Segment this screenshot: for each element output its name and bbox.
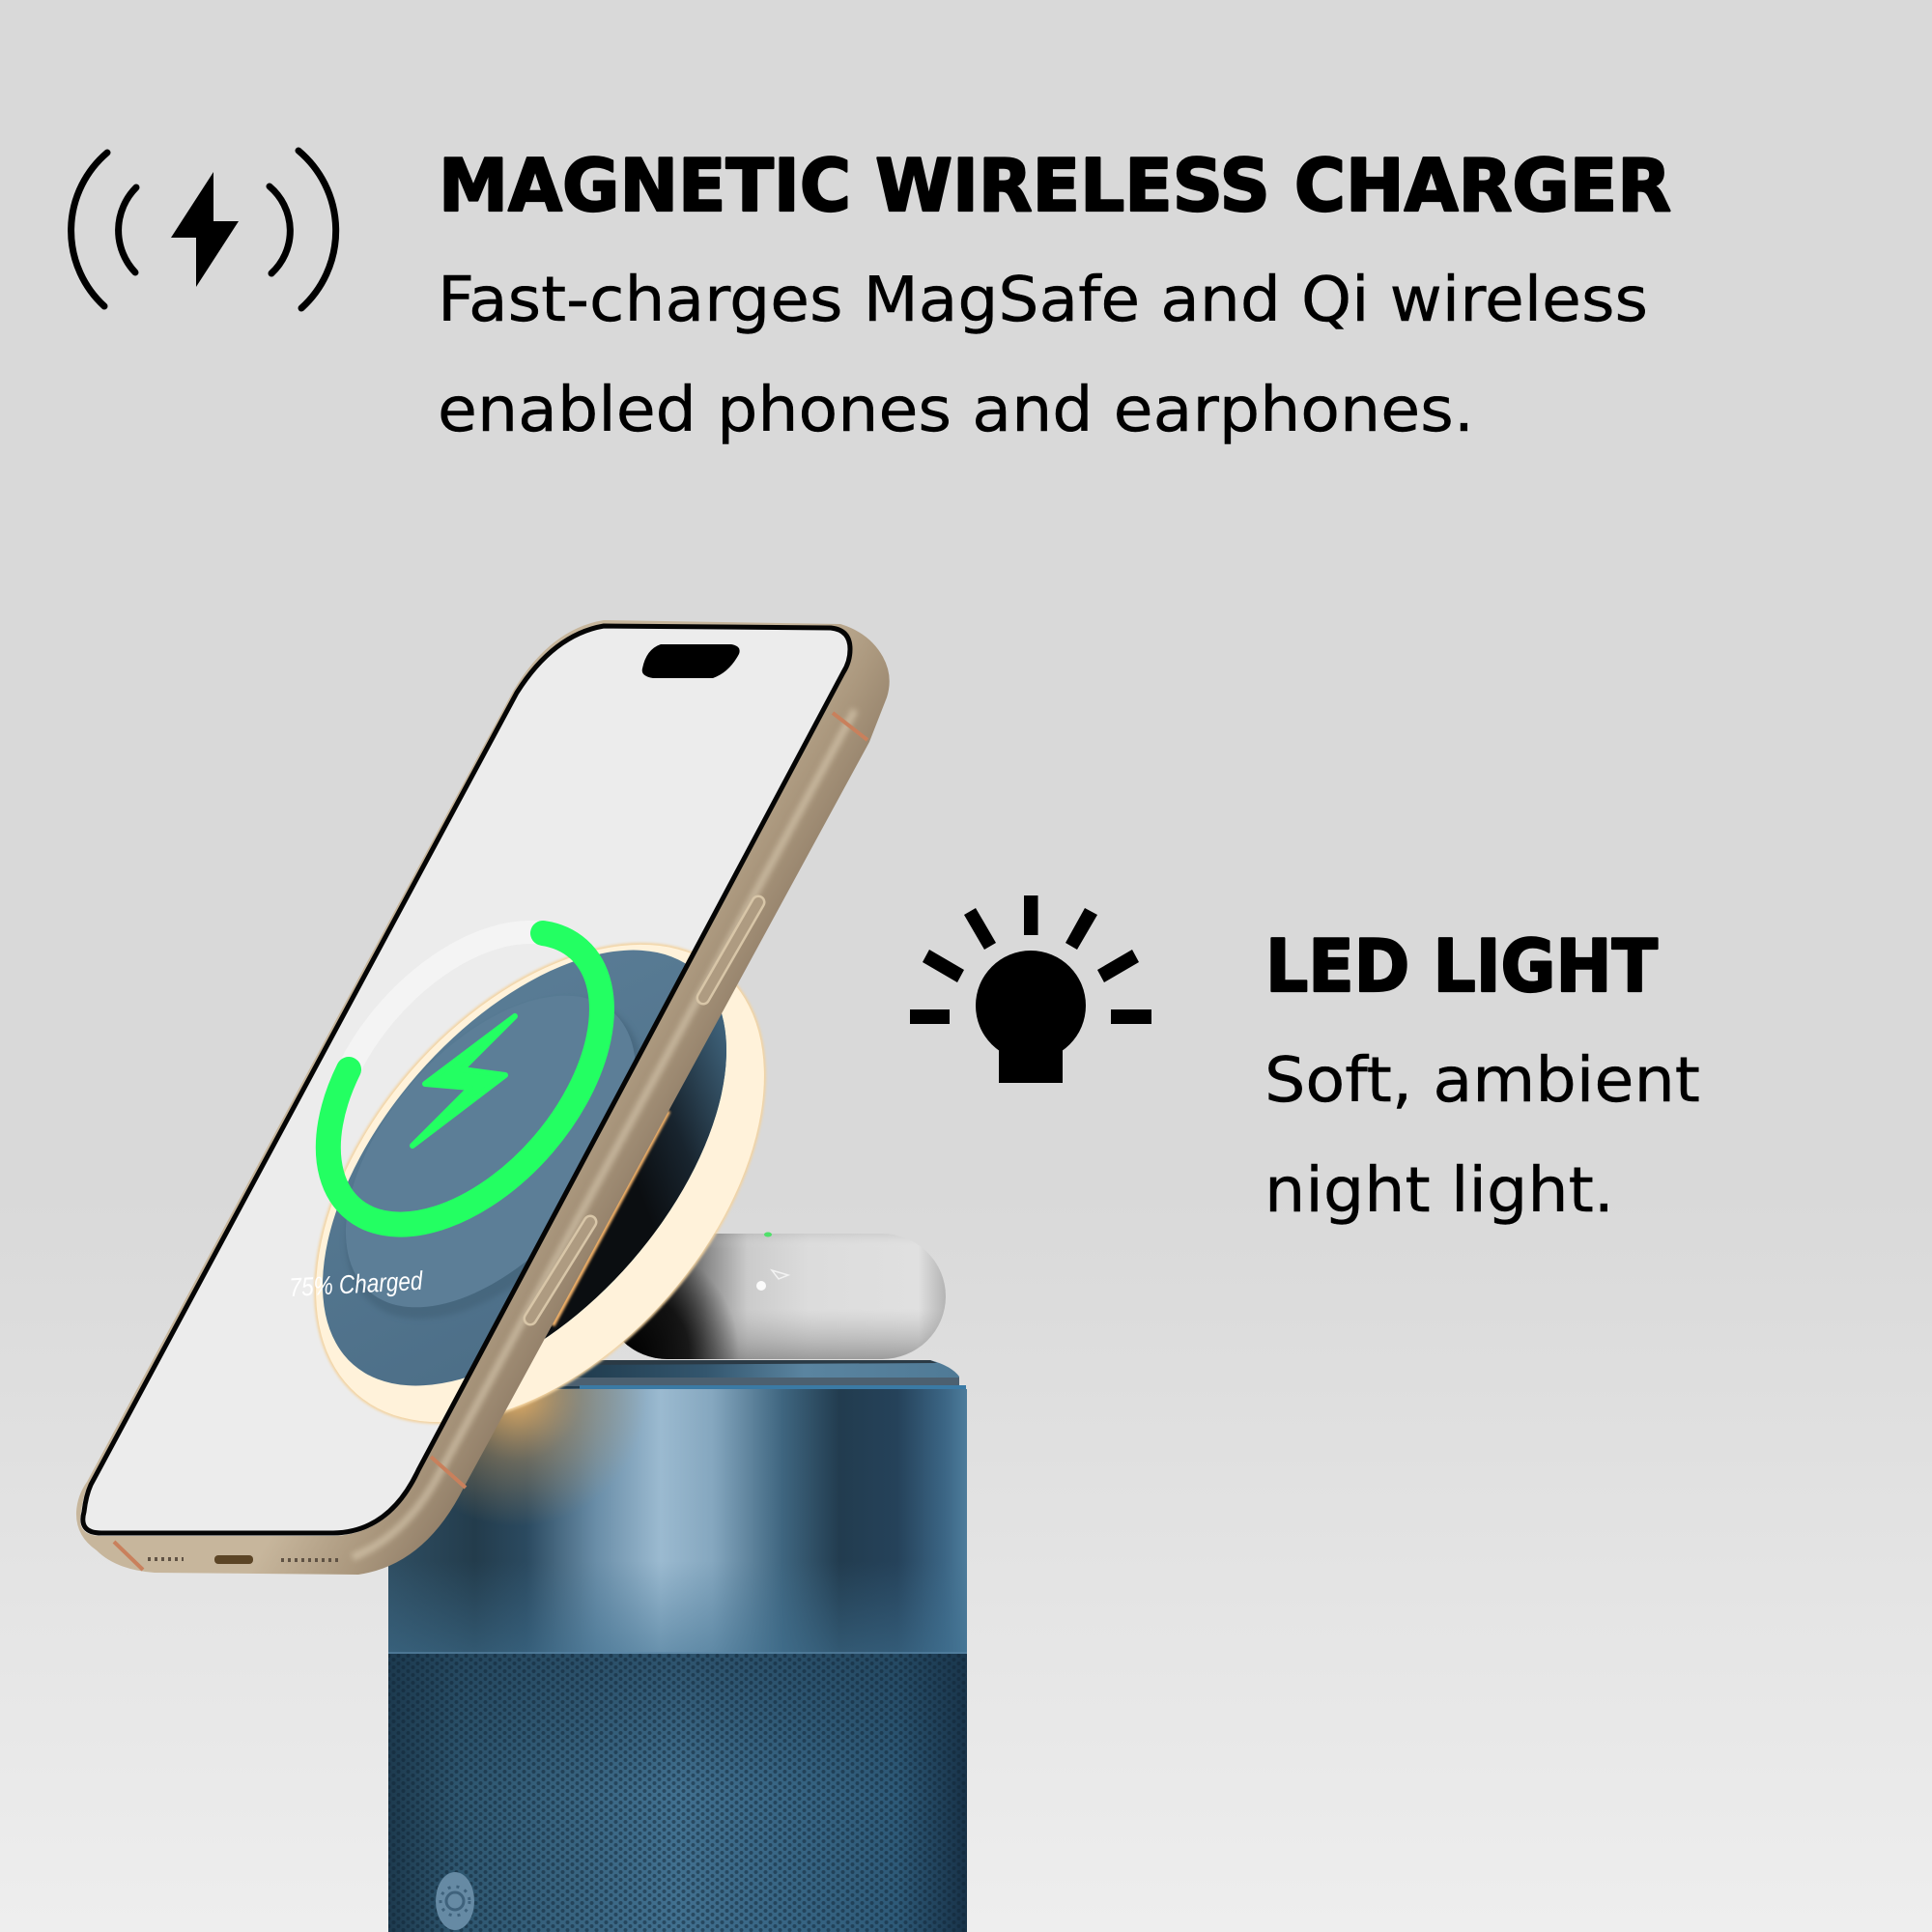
dark side of disc behind phone [545, 1013, 726, 1339]
phone [76, 620, 890, 1575]
camera island [642, 644, 740, 678]
top plate [541, 1360, 966, 1389]
icon: wireless charging bolt [71, 151, 336, 308]
charger base [388, 1360, 967, 1932]
antenna bands [114, 713, 867, 1570]
charge label: 75% Charged [289, 1266, 424, 1302]
heading: led light: LED LIGHT [1265, 923, 1658, 1009]
frame highlight [353, 710, 855, 1557]
phone screen [80, 624, 852, 1536]
heading: magnetic wireless charger: MAGNETIC WIRELESS CHARGER [439, 143, 1671, 228]
fabric body [388, 1654, 967, 1932]
light ring charging disc [313, 941, 767, 1426]
blue disc face [246, 878, 803, 1458]
raised puck [289, 943, 700, 1373]
light control button [436, 1872, 474, 1930]
lamp glow edge [553, 1111, 668, 1325]
icon: light bulb [910, 895, 1151, 1083]
text block: charger description [438, 265, 1648, 446]
text block: led description: Soft, ambient [1264, 1045, 1700, 1117]
icon: green lightning bolt [412, 1016, 515, 1146]
text block: charger description: enabled phones and earphones. [438, 375, 1474, 446]
phone titanium frame [76, 620, 890, 1575]
text block: charger description: Fast-charges MagSafe and Qi wireless [438, 265, 1648, 336]
text block: led description: night light. [1264, 1155, 1614, 1227]
charging port and speakers [148, 1555, 338, 1564]
earbuds case [604, 1233, 946, 1359]
metal band [388, 1389, 967, 1654]
side buttons [530, 902, 758, 1319]
screen border [83, 626, 850, 1533]
text block: led description [1264, 1045, 1700, 1227]
charging progress ring [328, 932, 602, 1225]
